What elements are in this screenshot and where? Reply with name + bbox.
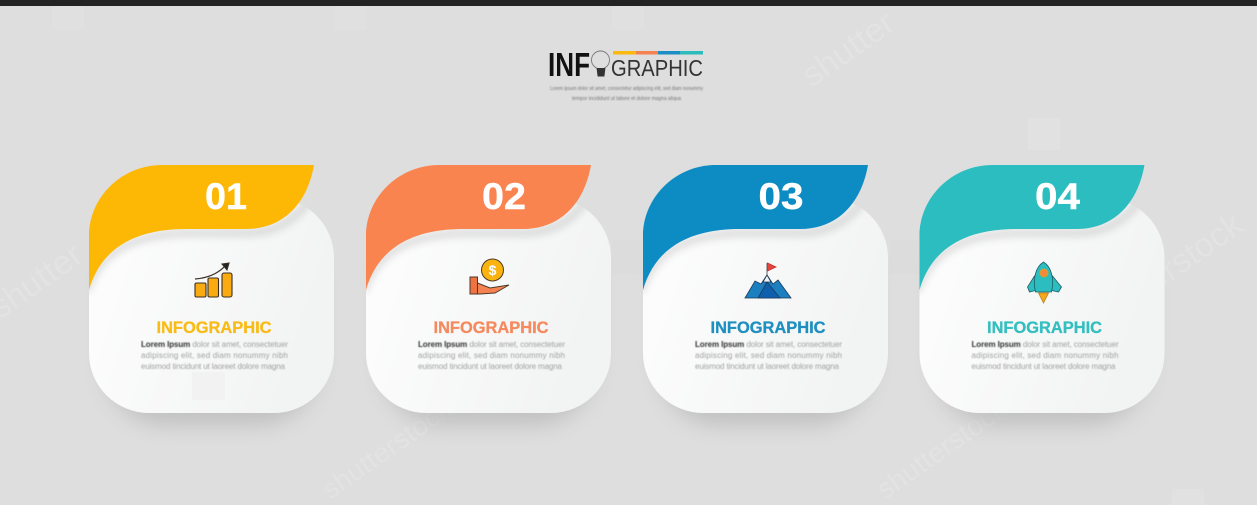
logo subtitle: Lorem ipsum dolor sit amet, consectetur adipiscing elit, sed diam nonummy bbox=[550, 86, 703, 92]
body text: Lorem Ipsum dolor sit amet, consectetuer bbox=[418, 340, 565, 349]
icon: hand with coin bbox=[470, 259, 509, 294]
watermarks: shutterstock bbox=[316, 392, 458, 505]
banner shadow bbox=[640, 196, 866, 292]
panel: card 04 bbox=[916, 165, 1164, 425]
card body bbox=[366, 198, 611, 413]
banner shadow bbox=[86, 196, 312, 292]
body text: adipiscing elit, sed diam nonummy nibh bbox=[695, 351, 842, 360]
icon: bar chart with arrow bbox=[195, 263, 232, 297]
watermarks: shutter bbox=[795, 4, 902, 95]
banner bbox=[643, 165, 868, 290]
number: 02 bbox=[482, 176, 526, 217]
logo subtitle bbox=[550, 86, 703, 102]
logo: INFOGRAPHIC bbox=[548, 46, 703, 102]
panel: card 03 bbox=[640, 165, 888, 425]
icon: light bulb bbox=[592, 51, 610, 76]
body text: euismod tincidunt ut laoreet dolore magna bbox=[418, 362, 563, 371]
panel: card 01 bbox=[86, 165, 334, 425]
watermarks: shutterstock bbox=[1078, 205, 1251, 342]
body text: Lorem Ipsum dolor sit amet, consectetuer bbox=[141, 340, 288, 349]
watermark stamp on card bbox=[192, 372, 225, 400]
icon: rocket bbox=[1028, 262, 1062, 303]
body text: adipiscing elit, sed diam nonummy nibh bbox=[141, 351, 288, 360]
body text bbox=[972, 340, 1119, 371]
heading: INFOGRAPHIC bbox=[434, 319, 549, 337]
heading: INFOGRAPHIC bbox=[987, 319, 1102, 337]
logo text INF: INF bbox=[548, 46, 590, 83]
number: 04 bbox=[1035, 176, 1080, 217]
logo subtitle: tempor incididunt ut labore et dolore magna aliqua bbox=[572, 96, 681, 102]
watermarks: shutterstock bbox=[871, 392, 1013, 505]
body text bbox=[141, 340, 288, 371]
body text: adipiscing elit, sed diam nonummy nibh bbox=[972, 351, 1118, 360]
card shadow bbox=[936, 225, 1148, 425]
card shadow bbox=[659, 225, 872, 425]
heading: INFOGRAPHIC bbox=[710, 319, 826, 337]
number: 01 bbox=[205, 176, 247, 217]
logo colour stripe bbox=[613, 51, 703, 54]
body text bbox=[695, 340, 842, 371]
number: 03 bbox=[758, 176, 804, 217]
card body bbox=[920, 198, 1164, 413]
card shadow bbox=[105, 225, 318, 425]
banner bbox=[920, 165, 1144, 290]
top black bar bbox=[0, 0, 1257, 6]
card shadow bbox=[382, 225, 595, 425]
banner bbox=[89, 165, 314, 290]
body text: adipiscing elit, sed diam nonummy nibh bbox=[418, 351, 565, 360]
heading: INFOGRAPHIC bbox=[156, 319, 272, 337]
body text: euismod tincidunt ut laoreet dolore magna bbox=[141, 362, 286, 371]
banner shadow bbox=[916, 196, 1142, 292]
banner shadow bbox=[363, 196, 589, 292]
panel: card 02 bbox=[363, 165, 611, 425]
icon: mountain with flag bbox=[745, 263, 791, 298]
body text: Lorem Ipsum dolor sit amet, consectetuer bbox=[972, 340, 1119, 349]
body text bbox=[418, 340, 565, 371]
card body bbox=[643, 198, 888, 413]
card body bbox=[89, 198, 334, 413]
body text: euismod tincidunt ut laoreet dolore magna bbox=[972, 362, 1116, 371]
logo text GRAPHIC: GRAPHIC bbox=[611, 55, 703, 81]
icon: hand with coin: $ bbox=[489, 262, 497, 278]
body text: euismod tincidunt ut laoreet dolore magna bbox=[695, 362, 840, 371]
body text: Lorem Ipsum dolor sit amet, consectetuer bbox=[695, 340, 842, 349]
banner bbox=[366, 165, 591, 290]
